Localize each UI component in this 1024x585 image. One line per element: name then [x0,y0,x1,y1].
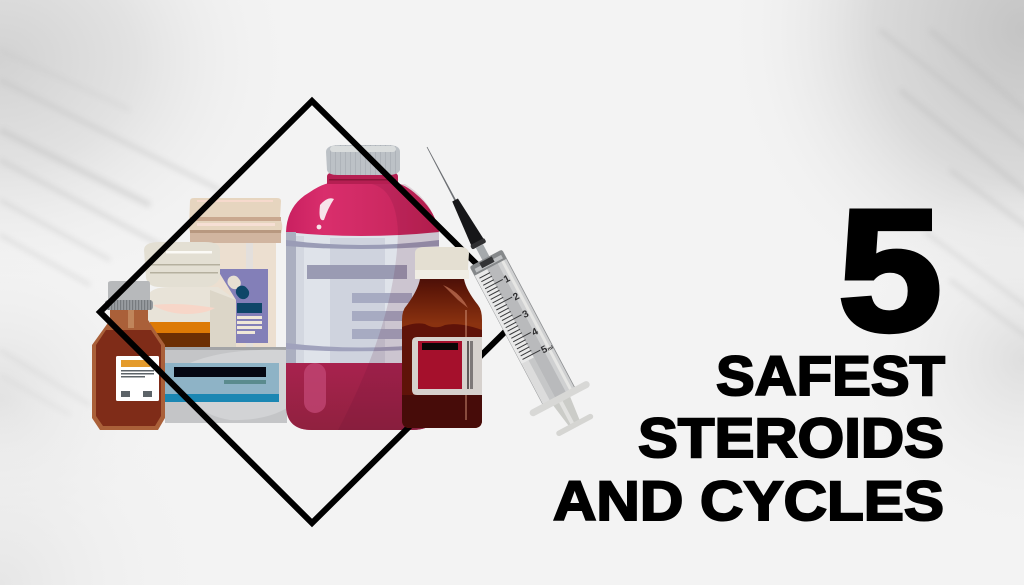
scale numbers: 2 [511,291,522,303]
numeral 5: 5 [838,173,942,367]
middle jar with orange contents [144,242,236,347]
brown bottle with white label [92,281,165,430]
scale numbers: 1 [502,273,512,286]
bottles behind the diamond [92,145,439,430]
needle hub [449,197,484,246]
back jar with purple label [189,198,282,348]
scale ticks [479,268,540,360]
box with blue label [165,347,287,423]
big cherry bottle [286,145,439,430]
title line 1: SAFEST [716,344,945,407]
title line 3: AND CYCLES [553,469,944,532]
title [553,344,945,532]
scale numbers [502,270,556,356]
scale numbers: 4 [530,326,541,339]
small amber bottle with red label [402,247,482,428]
title line 2: STEROIDS [638,406,944,469]
scale numbers: 5 [539,344,550,356]
black diamond outline [100,101,525,523]
syringe [397,132,605,444]
plunger rod [551,393,583,429]
scale numbers: ml [547,344,555,353]
barrel [470,250,576,406]
needle [426,147,457,202]
scale numbers: 3 [521,308,531,321]
